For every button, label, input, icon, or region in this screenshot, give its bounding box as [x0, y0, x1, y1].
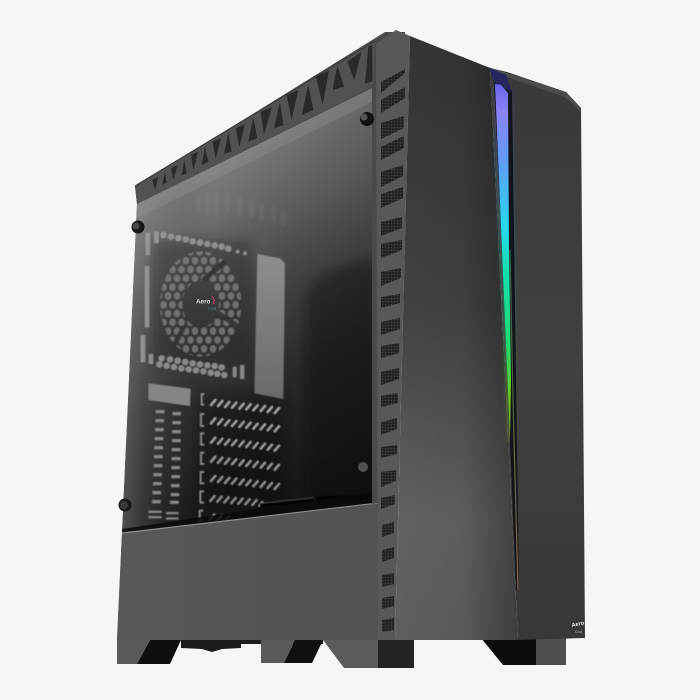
pale drive bracket	[254, 254, 285, 399]
rear inner bar	[259, 496, 342, 508]
column vents	[381, 69, 405, 632]
channel edge reflection	[510, 250, 518, 590]
glass side window	[120, 80, 380, 540]
drive slits columns	[148, 410, 181, 520]
feet	[117, 638, 566, 668]
light	[495, 84, 511, 440]
fan logo: Aero	[196, 298, 211, 305]
front panel right section	[488, 67, 585, 640]
PCI bracket plate	[148, 383, 191, 406]
motherboard tray lower shade	[203, 397, 278, 492]
fan logo: Cool	[208, 306, 216, 311]
vent column	[376, 30, 410, 640]
vent dots around fan	[141, 232, 247, 379]
fan mount area shade	[152, 240, 252, 365]
bracket marks	[200, 394, 204, 520]
fan grille	[160, 251, 243, 357]
glass mount screws	[118, 112, 374, 512]
top vent strip	[135, 41, 375, 204]
channel cap	[489, 68, 512, 92]
front brand logo: Aero	[571, 620, 585, 629]
slit rows	[211, 400, 279, 489]
cable routing recess	[304, 260, 372, 412]
dark channel	[494, 82, 519, 590]
fan logo	[196, 296, 216, 311]
infographic: PC tower case product image	[117, 30, 585, 668]
left side panel body	[117, 32, 405, 640]
front brand logo	[571, 620, 585, 634]
glass top frame band	[147, 88, 372, 212]
front brand logo: Cool	[575, 630, 582, 634]
interior upper rear perforations	[261, 210, 284, 224]
LED light strip	[489, 68, 519, 590]
glass bottom dark band	[122, 496, 369, 532]
lower PSU shroud panel	[117, 503, 378, 640]
front panel left section	[395, 36, 518, 640]
glass right frame	[372, 82, 378, 504]
partial slit rows	[210, 496, 262, 521]
